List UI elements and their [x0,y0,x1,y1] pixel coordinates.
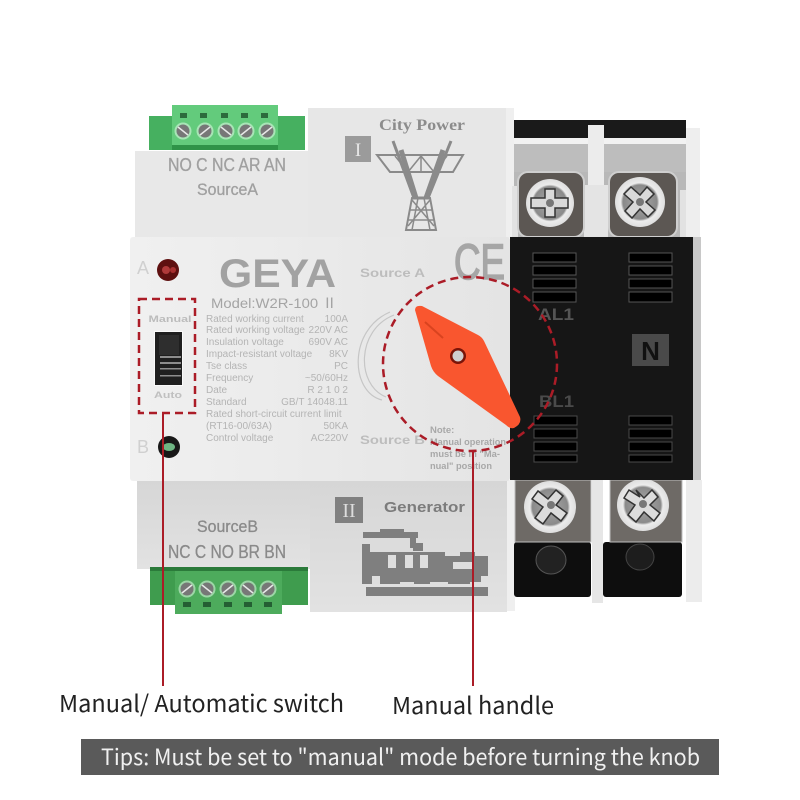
badge: N [632,334,669,366]
note text [430,425,506,472]
specification table: 220V AC [309,325,348,336]
mark: CE: CE [454,234,505,290]
label: Source B: Source B [360,435,425,447]
specification table: GB/T 14048.11 [281,397,348,408]
icon: rotation arrow [358,312,394,400]
specification table: 690V AC [309,337,348,348]
icon: top left terminal screw [518,172,584,237]
specification table: 50KA [324,421,348,432]
specification table: 100A [325,314,348,325]
note text: nual" position [430,461,492,472]
heading: SourceB: SourceB [197,517,258,536]
specification table: Standard [206,397,247,408]
heading: Generator: Generator [384,499,465,516]
specification table: AC220V [311,433,348,444]
icon: top right terminal screw [609,172,677,237]
specification table: Control voltage [206,433,274,444]
callout: manual/auto switch box and leader line [139,299,195,686]
heading: City Power: City Power [379,117,465,134]
specification table: Insulation voltage [206,337,284,348]
logo: GEYA: GEYA [219,252,336,296]
tips banner: Tips: Must be set to "manual" mode before turning the knob [101,740,700,772]
heading: SourceA: SourceA [197,180,259,199]
panel: white front plate [130,234,510,481]
label: AL1: AL1 [538,305,574,324]
label: Source A: Source A [360,268,425,280]
badge: N: N [641,336,660,366]
panel: lower module [137,480,507,612]
vents: upper left [533,253,576,302]
panel: right terminal block bottom [505,480,702,611]
vents: lower right [629,416,672,462]
icon: bottom left terminal screw [524,481,576,574]
specification table: Frequency [206,373,253,384]
specification table: Rated short-circuit current limit [206,409,342,420]
note text: Manual operation [430,437,506,448]
icon: manual/auto slide switch [154,331,183,386]
badge: II: II [342,500,356,522]
icon: bottom right terminal screw [617,479,669,570]
indicator: B [137,436,180,458]
model number: Model:W2R-100 Ⅱ [211,295,337,311]
specification table: Rated working voltage [206,325,305,336]
vents: lower left [534,416,577,462]
note text: Note: [430,425,454,436]
text: manual: Manual [148,314,192,325]
specification table: R 2 1 0 2 [307,385,348,396]
icon: power tower [377,141,463,230]
specification table [206,314,348,444]
specification table: Rated working current [206,314,304,325]
specification table: PC [334,361,348,372]
panel: black N pole cover [510,237,701,480]
specification table: Tse class [206,361,247,372]
specification table: Impact-resistant voltage [206,349,313,360]
icon: generator [362,529,488,596]
specification table: (RT16-00/63A) [206,421,272,432]
panel: upper module [135,108,506,238]
callout: manual handle circle and leader line [383,277,557,686]
specification table: Date [206,385,228,396]
badge: II [335,497,363,523]
badge: I [345,136,371,162]
indicator: A: A [137,258,149,278]
label: BL1: BL1 [539,392,574,411]
indicator: A [137,258,179,281]
indicator: B: B [137,437,149,457]
vents: upper right [629,253,672,302]
note text: must be in "Ma- [430,449,500,460]
icon: top green connector [149,105,305,150]
badge: I: I [355,140,361,161]
panel: right terminal block top [504,108,700,238]
icon: orange manual handle [415,306,520,428]
specification table: 8KV [329,349,348,360]
icon: bottom green connector [150,567,308,614]
terminal labels: source A: NO C NC AR AN [168,155,286,175]
specification table: ~50/60Hz [305,373,348,384]
label: Manual/ Automatic switch: Manual/ Automatic switch [59,685,344,719]
label: Manual handle: Manual handle [392,687,554,721]
text: auto: Auto [154,390,182,401]
terminal labels: source B: NC C NO BR BN [168,542,286,562]
